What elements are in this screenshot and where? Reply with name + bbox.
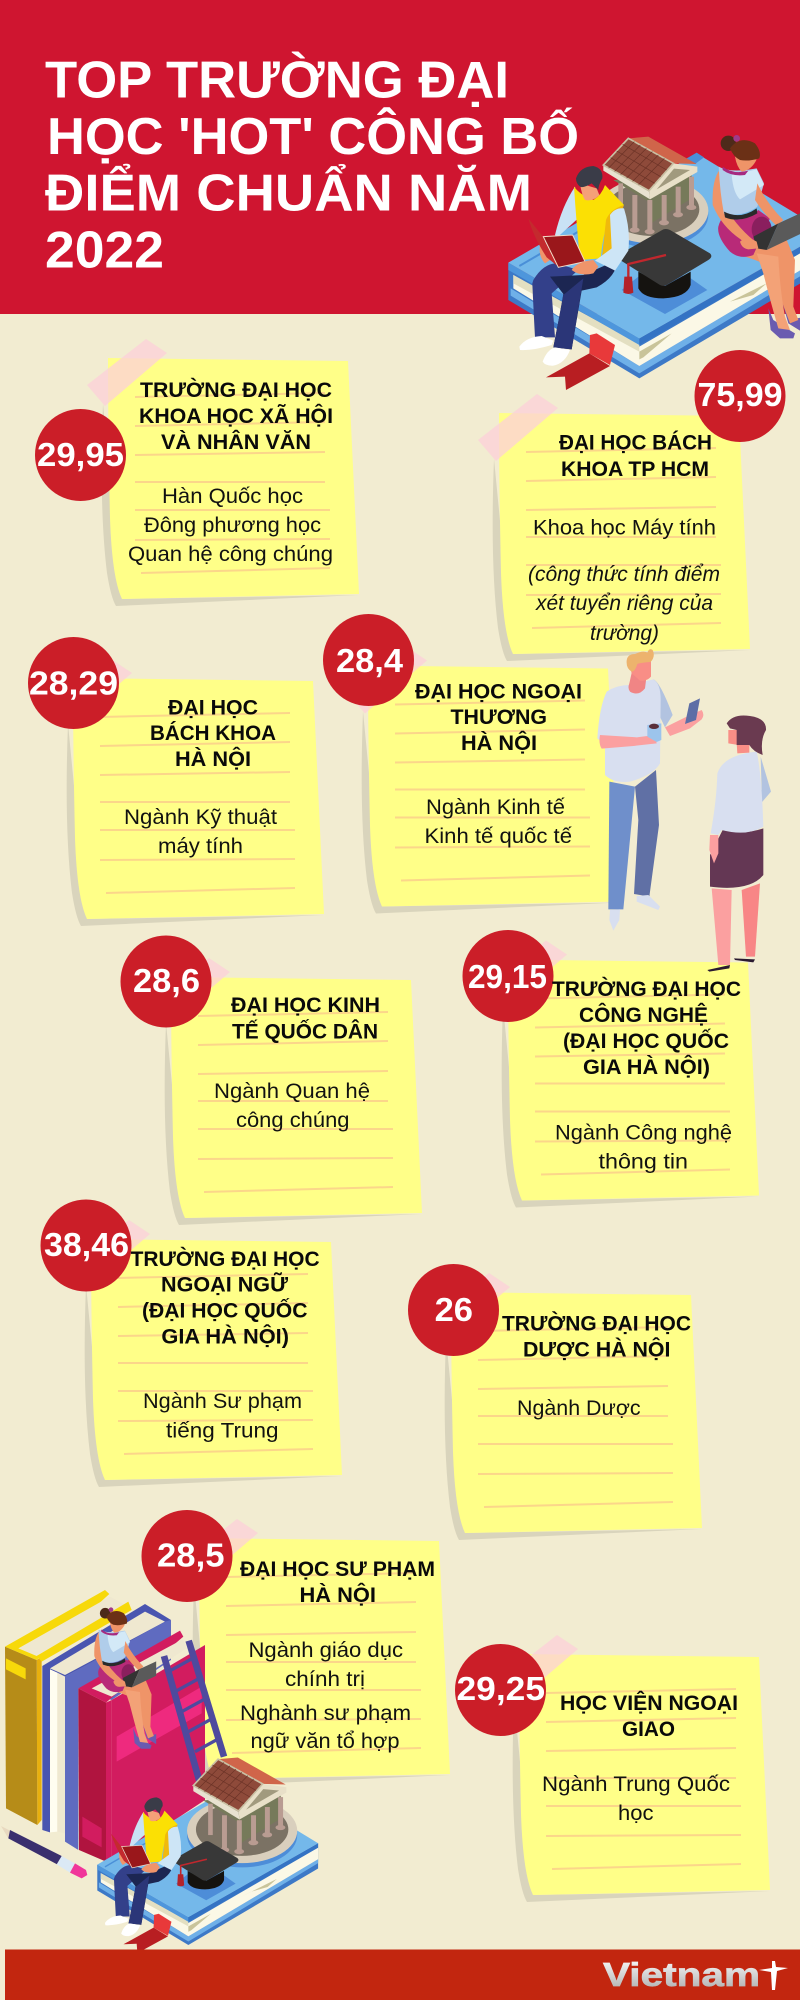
majors: học bbox=[618, 1802, 654, 1825]
panel: Ngoại thương Hà Nội bbox=[323, 614, 619, 914]
footer band bbox=[5, 1950, 800, 2000]
school name: TRƯỜNG ĐẠI HỌC bbox=[140, 378, 332, 402]
school name: VÀ NHÂN VĂN bbox=[161, 430, 311, 454]
illustration: students on a book with temple and graduation cap bbox=[508, 135, 800, 390]
majors: Quan hệ công chúng bbox=[128, 543, 333, 566]
majors: Ngành Kinh tế bbox=[426, 796, 565, 819]
score badge 29,95 bbox=[35, 409, 126, 501]
illustration: bottom girl with laptop bbox=[94, 1607, 156, 1749]
score badge 28,29: 28,29 bbox=[29, 665, 118, 702]
panel: Đại học Dược Hà Nội bbox=[408, 1264, 702, 1540]
score badge 28,5 bbox=[142, 1510, 232, 1602]
majors bbox=[542, 1773, 730, 1825]
score badge 75,99: 75,99 bbox=[698, 376, 782, 413]
majors: Đông phương học bbox=[144, 514, 321, 537]
school name: NGOẠI NGỮ bbox=[161, 1273, 289, 1297]
panel: Bách khoa TP HCM bbox=[478, 350, 786, 661]
majors: Ngành Sư phạm bbox=[143, 1390, 302, 1413]
school name bbox=[139, 378, 333, 454]
panel: Khoa học Xã hội và Nhân văn bbox=[35, 339, 359, 606]
school name: HỌC VIỆN NGOẠI bbox=[560, 1691, 738, 1715]
score badge 28,4: 28,4 bbox=[336, 642, 404, 679]
illustration: bottom cap and reading student bbox=[105, 1797, 238, 1936]
title: TOP TRƯỜNG ĐẠI bbox=[45, 52, 509, 110]
school name bbox=[502, 1312, 691, 1362]
majors bbox=[214, 1080, 370, 1132]
school name: ĐẠI HỌC BÁCH bbox=[559, 432, 712, 454]
score badge 38,46 bbox=[40, 1200, 132, 1292]
school name bbox=[415, 680, 582, 755]
majors: Nghành sư phạm bbox=[240, 1702, 411, 1725]
logo: Vietnam+ bbox=[603, 1956, 788, 1993]
panel: Đại học Ngoại ngữ bbox=[40, 1200, 342, 1487]
majors: Ngành Quan hệ bbox=[214, 1080, 370, 1103]
school name: CÔNG NGHỆ bbox=[579, 1003, 708, 1027]
score badge 28,29 bbox=[28, 637, 119, 729]
panel: Kinh tế Quốc dân bbox=[120, 936, 422, 1225]
school name: (ĐẠI HỌC QUỐC bbox=[563, 1029, 729, 1053]
panel: Bách khoa Hà Nội bbox=[28, 637, 324, 926]
majors: Ngành giáo dục bbox=[248, 1639, 403, 1662]
school name: BÁCH KHOA bbox=[150, 722, 276, 745]
school name bbox=[131, 1247, 320, 1349]
score badge 29,25 bbox=[455, 1644, 546, 1736]
majors bbox=[240, 1639, 411, 1753]
school name: (ĐẠI HỌC QUỐC bbox=[142, 1299, 308, 1323]
score badge 28,4 bbox=[323, 614, 414, 706]
school name: ĐẠI HỌC bbox=[168, 696, 258, 720]
school name: ĐẠI HỌC NGOẠI bbox=[415, 680, 582, 704]
majors: chính trị bbox=[285, 1668, 365, 1691]
panel: Sư phạm Hà Nội bbox=[142, 1510, 450, 1786]
majors bbox=[555, 1122, 732, 1174]
school name: ĐẠI HỌC KINH bbox=[231, 994, 380, 1017]
score badge 29,15: 29,15 bbox=[468, 958, 547, 995]
majors: máy tính bbox=[158, 835, 243, 858]
illustration: bottom temple bbox=[187, 1758, 297, 1867]
majors: Ngành Công nghệ bbox=[555, 1122, 732, 1144]
school name: GIA HÀ NỘI) bbox=[583, 1055, 710, 1079]
illustration: bottom student book bbox=[97, 1788, 318, 1953]
majors bbox=[128, 485, 333, 566]
score badge 75,99 bbox=[694, 350, 786, 442]
majors: Hàn Quốc học bbox=[162, 485, 303, 508]
majors: Khoa học Máy tính bbox=[533, 516, 716, 540]
school name: HÀ NỘI bbox=[175, 747, 251, 771]
majors bbox=[528, 516, 720, 645]
score badge 26: 26 bbox=[435, 1291, 473, 1328]
majors bbox=[143, 1390, 302, 1443]
score badge 26 bbox=[408, 1264, 499, 1356]
school name: TẾ QUỐC DÂN bbox=[232, 1020, 378, 1044]
majors: (công thức tính điểm bbox=[528, 563, 720, 586]
school name: TRƯỜNG ĐẠI HỌC bbox=[131, 1247, 320, 1271]
school name bbox=[240, 1558, 435, 1607]
school name: ĐẠI HỌC SƯ PHẠM bbox=[240, 1558, 435, 1581]
majors: Ngành Dược bbox=[517, 1397, 641, 1420]
score badge 29,25: 29,25 bbox=[456, 1670, 545, 1707]
title: ĐIỂM CHUẨN NĂM bbox=[45, 164, 532, 222]
school name bbox=[552, 977, 741, 1079]
score badge 29,15 bbox=[462, 930, 554, 1022]
school name: GIAO bbox=[622, 1718, 675, 1741]
majors: ngữ văn tổ hợp bbox=[250, 1730, 400, 1753]
title bbox=[45, 52, 579, 280]
illustration: two people talking bbox=[597, 649, 771, 972]
panel: Học viện Ngoại giao bbox=[455, 1635, 770, 1902]
icon: plus sign bbox=[759, 1961, 788, 1990]
school name: KHOA TP HCM bbox=[561, 458, 709, 481]
majors: trường) bbox=[590, 622, 659, 645]
school name: TRƯỜNG ĐẠI HỌC bbox=[552, 977, 741, 1001]
school name bbox=[559, 432, 712, 481]
title: 2022 bbox=[45, 222, 164, 280]
majors: công chúng bbox=[236, 1109, 350, 1132]
panel: Đại học Công nghệ bbox=[462, 930, 759, 1208]
school name: THƯƠNG bbox=[450, 706, 547, 729]
school name: GIA HÀ NỘI) bbox=[161, 1325, 289, 1349]
majors: xét tuyển riêng của bbox=[535, 592, 713, 615]
majors: Kinh tế quốc tế bbox=[424, 825, 572, 848]
majors bbox=[124, 806, 277, 858]
score badge 38,46: 38,46 bbox=[44, 1226, 129, 1263]
school name: TRƯỜNG ĐẠI HỌC bbox=[502, 1312, 691, 1336]
illustration: stack of books, ladder and pencil bbox=[1, 1590, 224, 1878]
majors: Ngành Kỹ thuật bbox=[124, 806, 277, 829]
school name bbox=[150, 696, 276, 771]
school name bbox=[231, 994, 380, 1044]
title: HỌC 'HOT' CÔNG BỐ bbox=[47, 107, 579, 166]
majors bbox=[424, 796, 572, 848]
school name bbox=[560, 1691, 738, 1741]
score badge 28,6: 28,6 bbox=[133, 962, 200, 999]
score badge 29,95: 29,95 bbox=[37, 436, 124, 473]
header band bbox=[0, 0, 800, 314]
majors: thông tin bbox=[598, 1150, 688, 1174]
school name: DƯỢC HÀ NỘI bbox=[523, 1338, 670, 1362]
majors: tiếng Trung bbox=[166, 1420, 278, 1443]
school name: KHOA HỌC XÃ HỘI bbox=[139, 404, 333, 428]
logo: Vietnam+: Vietnam bbox=[603, 1956, 760, 1993]
school name: HÀ NỘI bbox=[300, 1583, 376, 1607]
school name: HÀ NỘI bbox=[461, 731, 537, 755]
score badge 28,5: 28,5 bbox=[157, 1537, 224, 1574]
score badge 28,6 bbox=[120, 936, 212, 1028]
majors: Ngành Trung Quốc bbox=[542, 1773, 730, 1796]
